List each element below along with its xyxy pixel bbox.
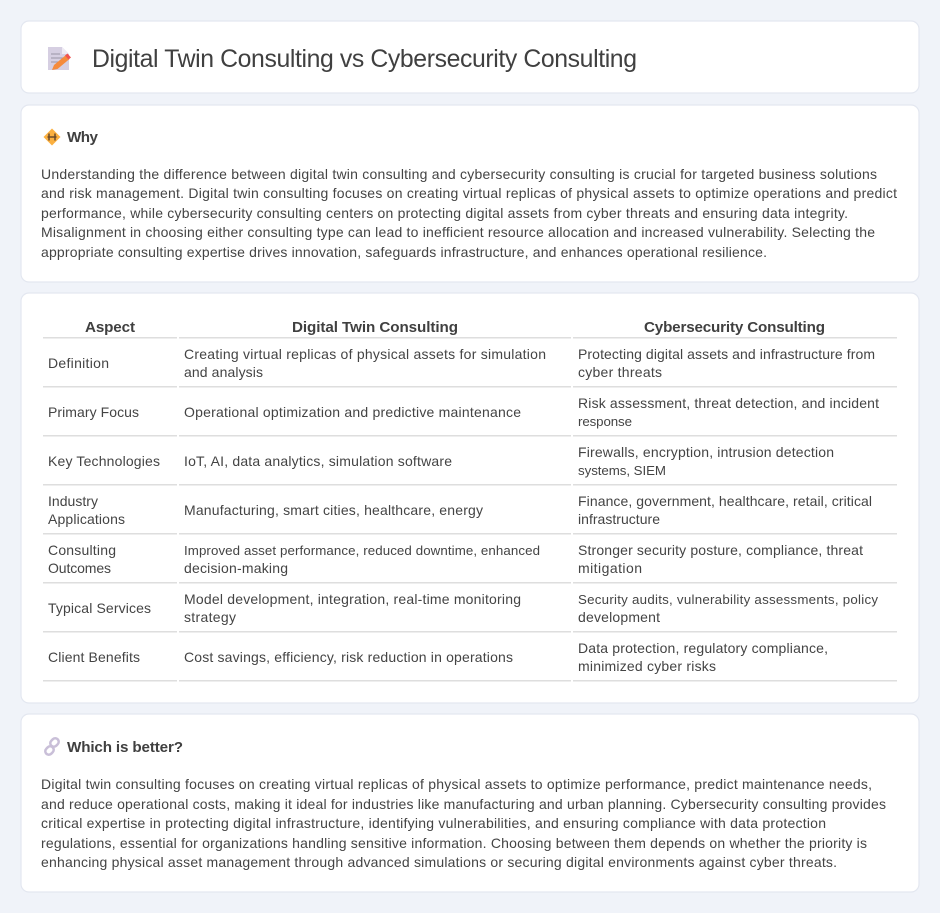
heading: which is better: Which is better?: [67, 739, 183, 756]
row: industry applications: infrastructure: [578, 511, 660, 527]
row: typical services: [43, 591, 897, 632]
row: definition: Creating virtual replicas of physical assets for simulation: [184, 346, 546, 362]
row: industry applications: Applications: [48, 511, 125, 527]
text block: why paragraph: Understanding the difference between digital twin consulting and cybersecurity consulting is crucial for targeted business solutions: [41, 166, 877, 182]
panel: comparison table: [21, 293, 919, 703]
row: consulting outcomes: [43, 542, 897, 584]
icon: orange diamond: [44, 128, 60, 146]
panel: title header: [21, 21, 919, 93]
row: primary focus: Operational optimization and predictive maintenance: [184, 404, 521, 420]
row: client benefits: Client Benefits: [48, 649, 140, 665]
row: primary focus: [43, 395, 897, 436]
table header row: [43, 319, 897, 338]
table header row: Aspect: [85, 319, 135, 336]
row: definition: Definition: [48, 355, 109, 371]
table header row: Cybersecurity Consulting: [644, 319, 825, 336]
text block: which is better paragraph: critical expertise in protecting digital infrastructure, identifying vulnerabilities, and ensuring compliance with data protection: [41, 815, 826, 831]
row: definition: Protecting digital assets and infrastructure from: [578, 346, 875, 362]
row: key technologies: IoT, AI, data analytics, simulation software: [184, 453, 452, 469]
row: client benefits: [43, 640, 897, 682]
row: consulting outcomes: Consulting: [48, 542, 116, 558]
text block: why paragraph: performance, while cybersecurity consulting centers on protecting digital assets from cyber threats and ensuring data integrity.: [41, 205, 848, 221]
row: industry applications: Manufacturing, smart cities, healthcare, energy: [184, 502, 483, 518]
row: industry applications: Finance, government, healthcare, retail, critical: [578, 493, 872, 509]
panel: why: [21, 105, 919, 282]
row: typical services: strategy: [184, 609, 236, 625]
text block: which is better paragraph: regulations, essential for organizations handling sensitive information. Choosing between them depends on whether the priority is: [41, 835, 867, 851]
row: primary focus: Primary Focus: [48, 404, 139, 420]
row: typical services: Typical Services: [48, 600, 151, 616]
row: primary focus: response: [578, 414, 632, 429]
row: consulting outcomes: decision-making: [184, 560, 288, 576]
text block: why paragraph: [41, 166, 897, 260]
row: consulting outcomes: Outcomes: [48, 560, 111, 576]
row: client benefits: Data protection, regulatory compliance,: [578, 640, 828, 656]
row: key technologies: [43, 444, 897, 486]
row: typical services: development: [578, 609, 660, 625]
row: definition: cyber threats: [578, 364, 662, 380]
row: key technologies: systems, SIEM: [578, 463, 666, 478]
row: definition: and analysis: [184, 364, 263, 380]
row: client benefits: minimized cyber risks: [578, 658, 716, 674]
row: industry applications: Industry: [48, 493, 98, 509]
icon: memo with pencil: [48, 47, 71, 70]
row: key technologies: Firewalls, encryption, intrusion detection: [578, 444, 834, 460]
text block: why paragraph: Misalignment in choosing either consulting type can lead to inefficient resource allocation and increased vulnerability. Selecting the: [41, 224, 875, 240]
text block: why paragraph: and risk management. Digital twin consulting focuses on creating virtual replicas of physical assets to optimize operations and predict: [41, 185, 897, 201]
row: definition: [43, 346, 897, 388]
text block: which is better paragraph: and reduce operational costs, making it ideal for industries like manufacturing and urban planning. Cybersecurity consulting provides: [41, 796, 886, 812]
panel: which is better: [21, 714, 919, 892]
row: consulting outcomes: mitigation: [578, 560, 642, 576]
table header row: Digital Twin Consulting: [292, 319, 458, 336]
text block: which is better paragraph: [41, 776, 886, 870]
text block: which is better paragraph: enhancing physical asset management through advanced simulations or securing digital environments against cyber threats.: [41, 854, 837, 870]
row: typical services: Security audits, vulnerability assessments, policy: [578, 592, 878, 607]
text block: which is better paragraph: Digital twin consulting focuses on creating virtual replicas of physical assets to optimize performance, predict maintenance needs,: [41, 776, 872, 792]
row: key technologies: Key Technologies: [48, 453, 160, 469]
title: Digital Twin Consulting vs Cybersecurity Consulting: [92, 46, 637, 73]
row: consulting outcomes: Improved asset performance, reduced downtime, enhanced: [184, 543, 540, 558]
row: primary focus: Risk assessment, threat detection, and incident: [578, 395, 879, 411]
text block: why paragraph: appropriate consulting expertise drives innovation, safeguards infrastructure, and enhances operational resilience.: [41, 244, 767, 260]
row: industry applications: [43, 493, 897, 534]
row: client benefits: Cost savings, efficiency, risk reduction in operations: [184, 649, 513, 665]
icon: link: [44, 737, 60, 756]
row: consulting outcomes: Stronger security posture, compliance, threat: [578, 542, 863, 558]
heading: why: Why: [67, 129, 99, 146]
row: typical services: Model development, integration, real-time monitoring: [184, 591, 521, 607]
